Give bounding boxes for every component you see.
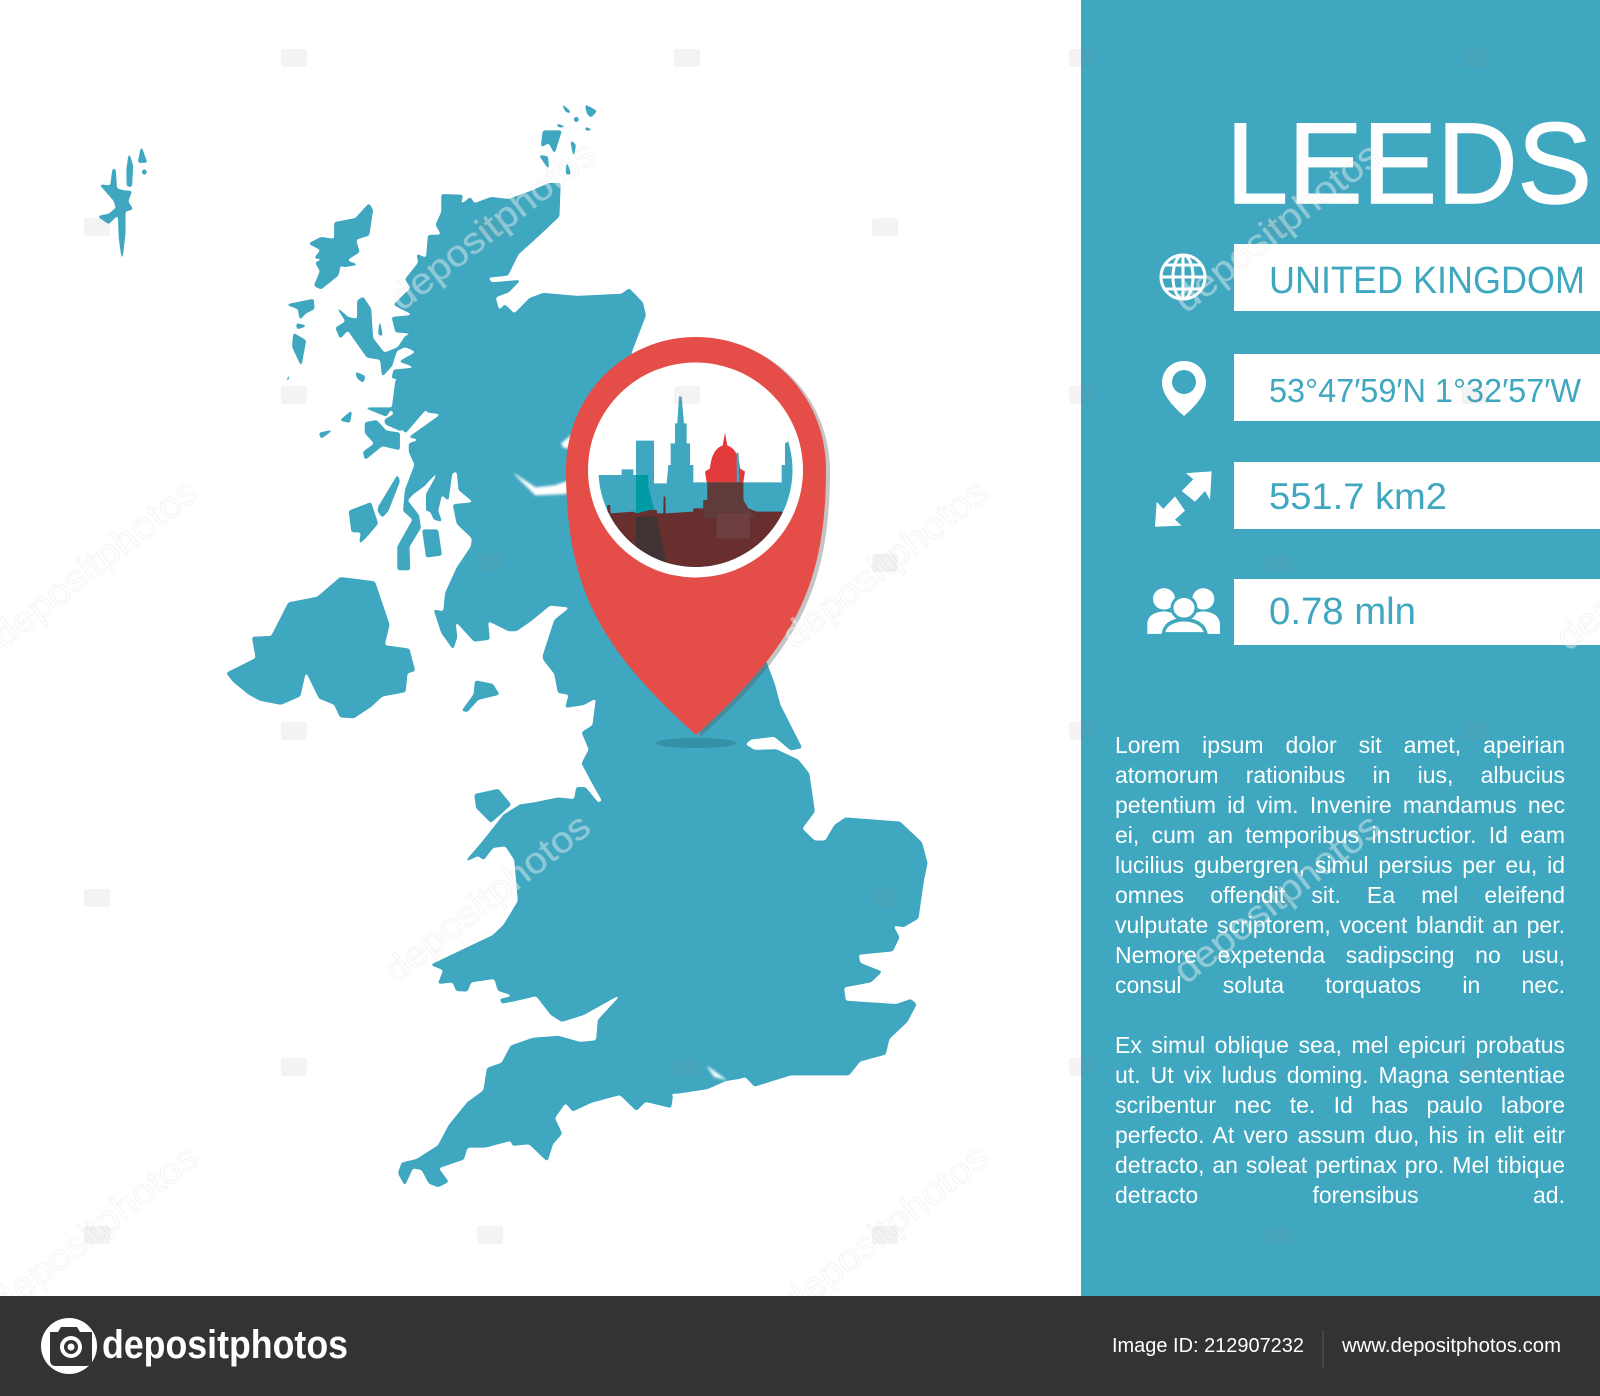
watermark text: depositphotos xyxy=(774,470,996,656)
watermark text: depositphotos xyxy=(774,1136,996,1322)
body text: Lorem ipsum dolor sit amet, apeirian xyxy=(1115,732,1565,758)
population text: 0.78 mln xyxy=(1269,591,1416,633)
watermark text: depositphotos xyxy=(376,805,598,991)
watermark text: depositphotos xyxy=(1166,805,1388,991)
body text: Ex simul oblique sea, mel epicuri probatus xyxy=(1115,1032,1565,1058)
body text: ut. Ut vix ludus doming. Magna sententiae xyxy=(1115,1062,1565,1088)
icon: globe xyxy=(1161,255,1205,299)
logo wordmark: depositphotos xyxy=(102,1323,348,1367)
country bar xyxy=(1234,244,1600,311)
watermark text: depositphotos xyxy=(382,132,604,318)
map pin with skyline xyxy=(566,337,830,748)
body text: omnes offendit sit. Ea mel eleifend xyxy=(1115,882,1565,908)
body text: detracto, an soleat pertinax pro. Mel tibique xyxy=(1115,1152,1565,1178)
pin window xyxy=(588,362,803,578)
body text: lucilius gubergren, simul persius per eu, id xyxy=(1115,852,1565,878)
body text: petentium id vim. Invenire mandamus nec xyxy=(1115,792,1565,818)
row: area xyxy=(1155,462,1600,529)
website: www.depositphotos.com xyxy=(1341,1335,1561,1357)
body text: consul soluta torquatos in nec. xyxy=(1115,972,1565,998)
area bar xyxy=(1234,462,1600,529)
title: LEEDS xyxy=(1226,100,1592,228)
row: country xyxy=(1161,244,1600,311)
body text: perfecto. At vero assum duo, his in elit eitr xyxy=(1115,1122,1565,1148)
row: population xyxy=(1147,579,1600,645)
icon: camera logo xyxy=(41,1318,97,1374)
icon: people xyxy=(1147,588,1220,634)
pin ground shadow xyxy=(656,738,736,748)
image id: Image ID: 212907232 xyxy=(1112,1335,1304,1357)
body text: scribentur nec te. Id has paulo labore xyxy=(1115,1092,1565,1118)
icon: location pin xyxy=(1162,361,1206,416)
map: United Kingdom xyxy=(98,103,927,1187)
panel: info sidebar xyxy=(1081,0,1600,1296)
body text: Nemore expetenda sadipscing no usu, xyxy=(1115,942,1565,968)
body text: vulputate scriptorem, vocent blandit an per. xyxy=(1115,912,1565,938)
body text: atomorum rationibus in ius, albucius xyxy=(1115,762,1565,788)
map: England and Wales xyxy=(398,591,927,1187)
footer bar xyxy=(0,1296,1600,1396)
body text: ei, cum an temporibus instructior. Id eam xyxy=(1115,822,1565,848)
country text: UNITED KINGDOM xyxy=(1269,260,1585,302)
map: Scotland and islands xyxy=(98,103,654,718)
area text: 551.7 km2 xyxy=(1269,476,1447,517)
footer logo xyxy=(41,1318,348,1374)
skyline illustration xyxy=(593,397,800,573)
body text xyxy=(1115,732,1565,1208)
watermark cameras xyxy=(84,49,1488,1244)
watermark text: depositphotos xyxy=(1166,134,1388,320)
body text: detracto forensibus ad. xyxy=(1115,1182,1565,1208)
coordinates bar xyxy=(1234,354,1600,421)
pin drop shadow xyxy=(700,339,830,737)
pin body xyxy=(566,337,826,735)
population bar xyxy=(1234,579,1600,645)
icon: resize arrows xyxy=(1155,471,1212,527)
coordinates text: 53°47′59′N 1°32′57′W xyxy=(1269,372,1582,409)
row: coordinates xyxy=(1162,354,1600,421)
